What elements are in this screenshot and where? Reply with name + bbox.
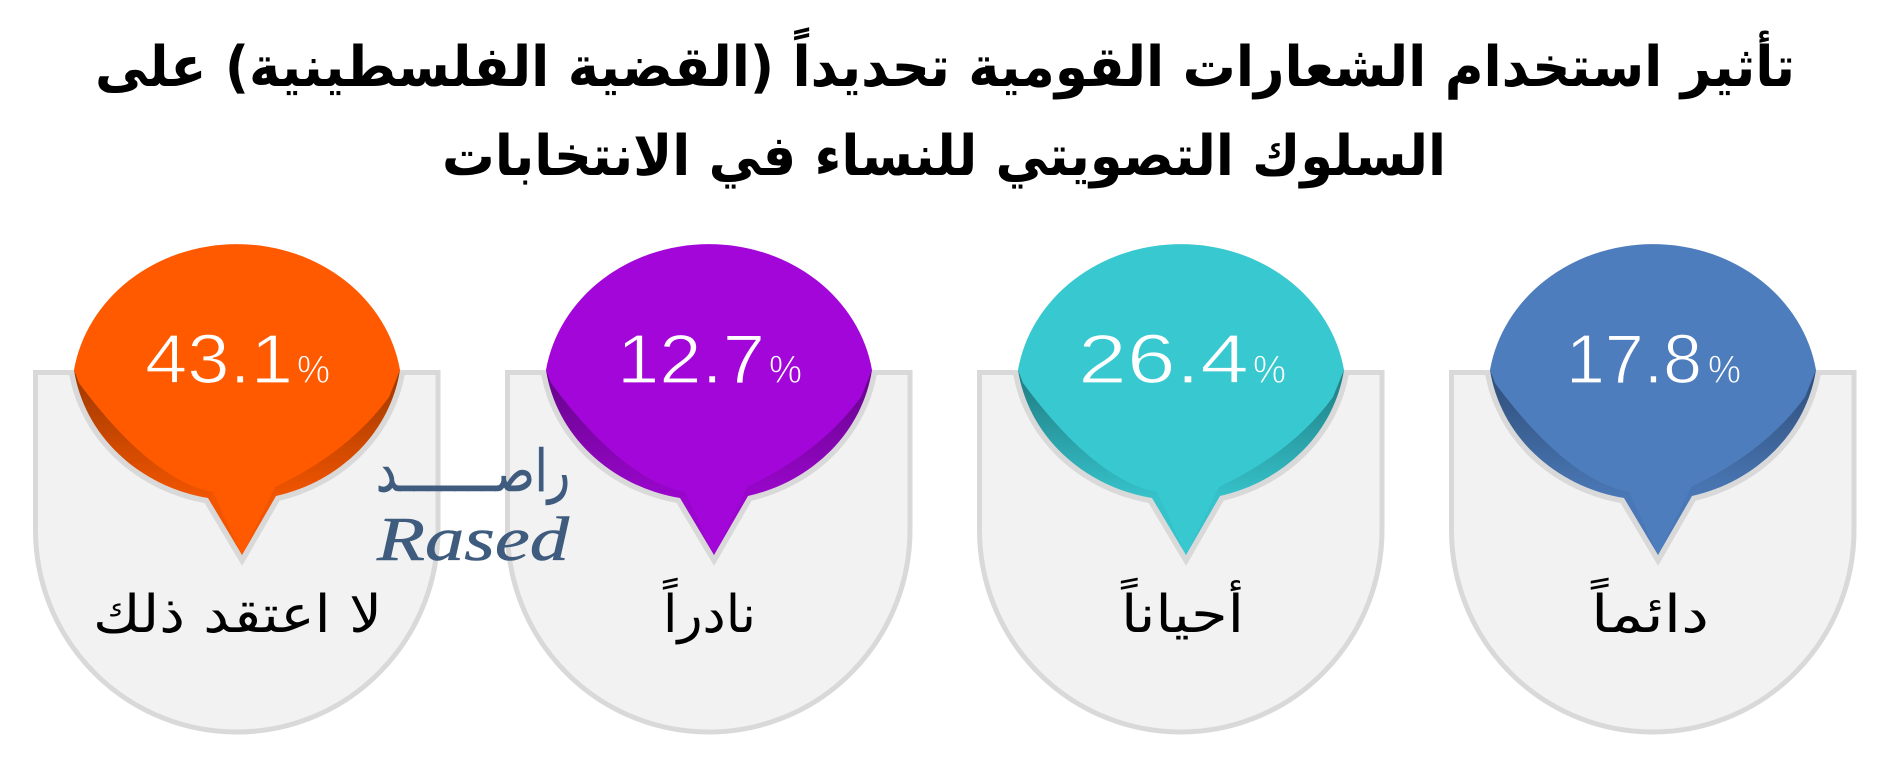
percent sign: % bbox=[1253, 349, 1286, 392]
value: 17.8%: 17.8 bbox=[1566, 320, 1702, 398]
bubble: purple bbox=[546, 244, 872, 555]
value: 12.7%: 12.7 bbox=[617, 320, 765, 398]
title bbox=[95, 27, 1795, 189]
bubble: orange bbox=[74, 244, 400, 555]
bubble: blue bbox=[1490, 244, 1816, 555]
label: دائماً: دائماً bbox=[1590, 578, 1709, 645]
panel: نادراً bbox=[508, 244, 910, 732]
percent sign: % bbox=[769, 349, 802, 392]
label: لا اعتقد ذلك: لا اعتقد ذلك bbox=[93, 585, 382, 645]
value: 26.4%: 26.4 bbox=[1078, 320, 1249, 398]
percent sign: % bbox=[1708, 349, 1741, 392]
value: 43.1%: 43.1 bbox=[145, 320, 293, 398]
panel: دائماً bbox=[1452, 244, 1854, 732]
logo: Rased: Rased bbox=[376, 506, 570, 574]
logo: Rased: راصـــــــد bbox=[376, 437, 570, 505]
logo: Rased bbox=[376, 437, 570, 574]
title: تأثير استخدام الشعارات القومية تحديداً (القضية الفلسطينية) على bbox=[95, 27, 1795, 100]
panel: أحياناً bbox=[980, 244, 1382, 732]
panel: لا اعتقد ذلك bbox=[36, 244, 438, 732]
label: أحياناً: أحياناً bbox=[1120, 578, 1244, 645]
percent sign: % bbox=[297, 349, 330, 392]
label: نادراً: نادراً bbox=[662, 578, 756, 645]
title: السلوك التصويتي للنساء في الانتخابات bbox=[442, 124, 1446, 189]
bubble: teal bbox=[1018, 244, 1344, 555]
